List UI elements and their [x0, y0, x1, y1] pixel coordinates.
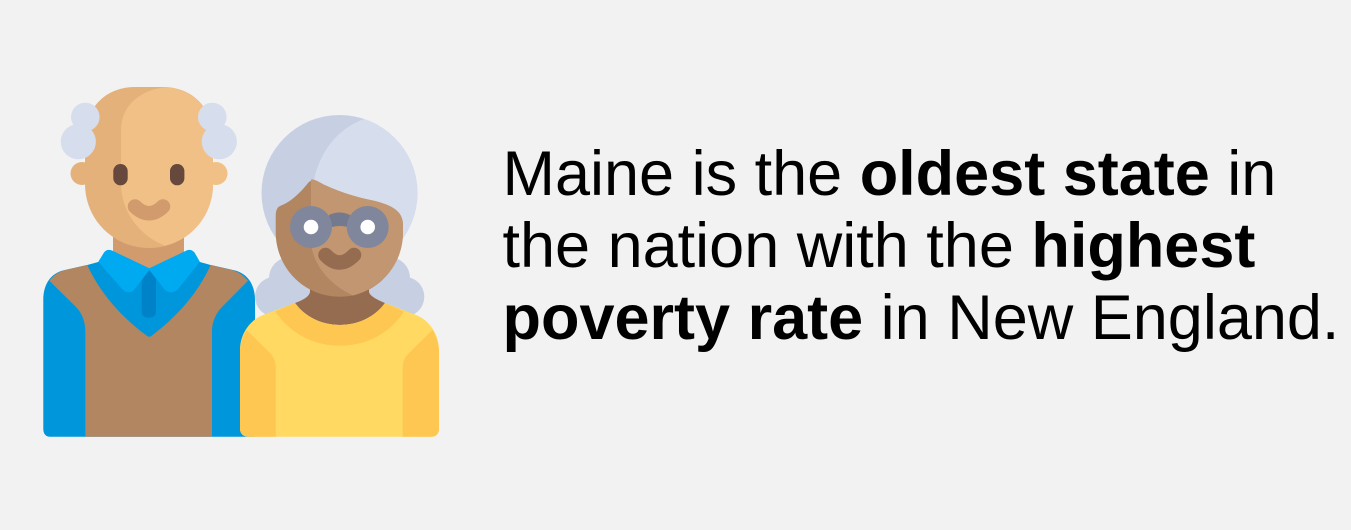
- man sleeves: [43, 265, 255, 437]
- text block: Maine statement: the nation with the highest: [502, 211, 1255, 281]
- man eyes: [113, 164, 184, 185]
- woman hair highlight: [312, 119, 417, 238]
- text block: Maine statement: Maine is the oldest state in: [502, 139, 1276, 209]
- woman face highlight: [311, 179, 403, 296]
- man face highlight: [121, 87, 213, 246]
- man hair: [61, 103, 237, 159]
- woman sweater: [240, 303, 439, 437]
- man tie: [142, 268, 156, 318]
- woman face: [276, 180, 403, 297]
- woman lower hair: [255, 257, 424, 320]
- woman neck: [295, 285, 385, 325]
- woman figure: [240, 115, 439, 437]
- woman sleeves: [240, 330, 439, 437]
- text block: Maine statement: [502, 139, 1339, 353]
- man smile: [135, 206, 163, 213]
- illustration: elderly couple: [43, 87, 439, 437]
- man vest: [49, 265, 248, 437]
- man shirt front: [87, 262, 211, 337]
- man figure: [43, 87, 255, 437]
- woman sweater yoke: [275, 303, 404, 346]
- text block: Maine statement: poverty rate in New England.: [502, 283, 1339, 353]
- woman hair: [262, 115, 418, 271]
- man neck: [113, 225, 184, 270]
- woman smile: [326, 255, 354, 262]
- man head: [85, 87, 213, 248]
- woman glasses: [290, 206, 389, 248]
- man neck lower part: [113, 250, 184, 268]
- man ears: [70, 162, 228, 185]
- man collar: [98, 250, 200, 292]
